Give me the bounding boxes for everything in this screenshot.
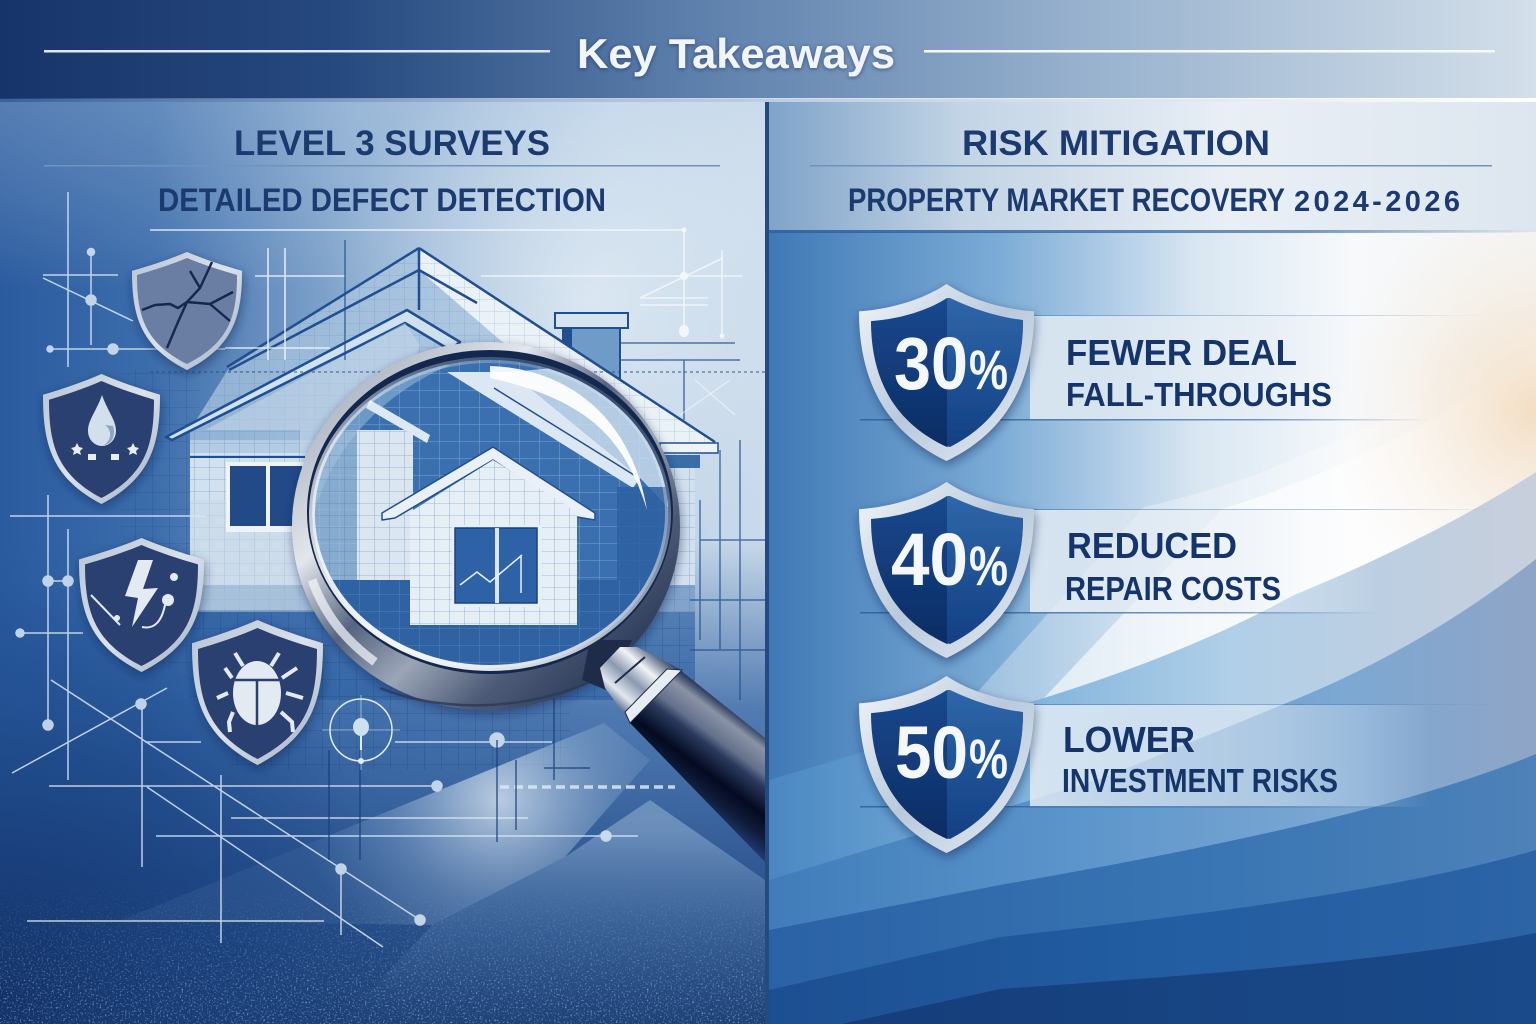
stat row: 30% <box>859 284 1490 461</box>
right heading strip <box>769 102 1536 233</box>
stat row: 30%: FALL-THROUGHS <box>1066 376 1332 413</box>
icon: lightning bolt and wiring <box>125 560 158 627</box>
label: FEWER DEAL <box>1066 332 1297 373</box>
panel divider <box>765 102 769 1024</box>
section heading: RISK MITIGATION <box>962 124 1270 163</box>
shield: % <box>969 338 1008 401</box>
section subheading: DETAILED DEFECT DETECTION <box>158 182 606 218</box>
shield <box>859 284 1034 461</box>
label: REDUCED <box>1067 525 1237 566</box>
shield: 30 <box>894 322 968 405</box>
icon: beetle <box>233 661 281 725</box>
handle <box>582 640 765 862</box>
upper roof <box>190 267 504 453</box>
icon: water drop <box>88 395 116 446</box>
left panel background <box>0 102 765 1024</box>
window <box>226 462 304 532</box>
lens glare <box>490 366 647 510</box>
shield: pests <box>192 620 323 765</box>
lens rim <box>312 360 668 668</box>
shield: 50 <box>895 711 968 794</box>
title rule right <box>924 50 1495 52</box>
stat row: 50% <box>859 676 1500 853</box>
drafting verticals <box>329 680 590 860</box>
title rule left <box>44 50 550 52</box>
lens upper highlight <box>510 368 668 508</box>
blueprint annotation lines <box>10 192 675 947</box>
label: LOWER <box>1063 719 1195 760</box>
magnifying glass <box>292 342 765 862</box>
outer ring <box>292 342 680 710</box>
panel: risk mitigation <box>769 102 1536 1024</box>
stat row: 40% <box>859 482 1500 658</box>
header band <box>0 0 1536 102</box>
shield: 40 <box>891 518 968 601</box>
section heading: LEVEL 3 SURVEYS <box>234 124 550 163</box>
panel: level 3 surveys <box>0 102 765 1024</box>
right side drafting <box>150 230 765 700</box>
date range: 2024-2026 <box>1294 186 1460 218</box>
stat row: 50%: INVESTMENT RISKS <box>1062 762 1338 799</box>
icon: wall crack <box>142 262 233 348</box>
section subheading: PROPERTY MARKET RECOVERY <box>848 182 1285 218</box>
shield: electrical <box>79 538 204 672</box>
right panel background <box>769 200 1536 1024</box>
shield: cracks <box>132 252 242 370</box>
stat row: 40%: REPAIR COSTS <box>1065 570 1281 607</box>
title: Key Takeaways <box>577 30 895 77</box>
lens view <box>312 360 668 668</box>
shield: % <box>969 727 1008 790</box>
blueprint house <box>150 228 765 700</box>
shield <box>859 676 1034 853</box>
target icon <box>322 695 400 770</box>
lower gable <box>166 310 460 440</box>
chimney <box>563 328 620 378</box>
inner house <box>382 447 595 625</box>
shield: % <box>969 534 1008 597</box>
shield <box>859 482 1034 658</box>
shield: water damage <box>43 374 160 504</box>
